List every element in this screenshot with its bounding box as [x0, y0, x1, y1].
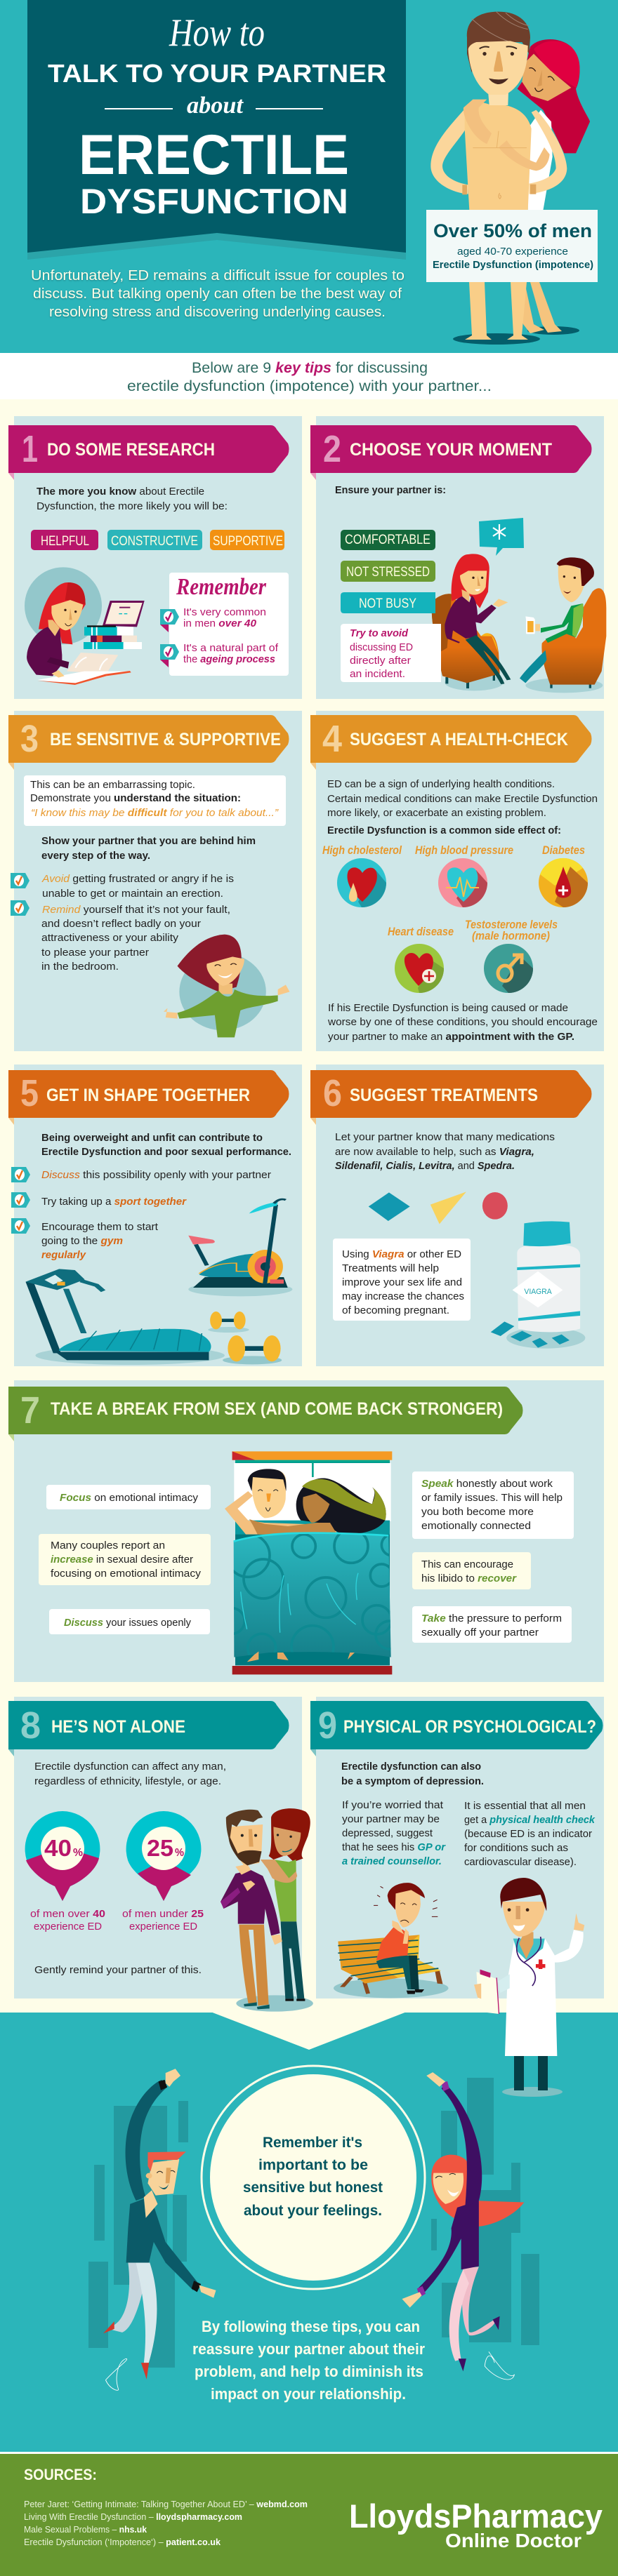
- sources: Male Sexual Problems – nhs.uk: [24, 2524, 147, 2535]
- stat box: over 50% of men: [426, 210, 598, 282]
- condition: testosterone levels: [465, 918, 558, 993]
- text column: health check: get a physical health check: [464, 1814, 596, 1826]
- tip: remind: and doesn’t reflect badly on your: [41, 918, 201, 930]
- text column: health check: [464, 1800, 596, 1868]
- intro text: Sildenafil, Cialis, Levitra, and Spedra.: [335, 1160, 515, 1172]
- condition: high cholesterol: High cholesterol: [322, 843, 402, 857]
- stat box: over 50% of men: aged 40-70 experience: [457, 246, 568, 258]
- chart: 25 percent pin: [122, 1811, 204, 1933]
- panel: 2 choose your moment: [310, 416, 606, 699]
- sources: [24, 2466, 308, 2547]
- closing statement: [192, 2318, 425, 2403]
- illustration: couple in armchairs: [432, 554, 606, 693]
- callout: using viagra: Using Viagra or other ED: [342, 1248, 461, 1260]
- callout: speak: [412, 1471, 574, 1539]
- ribbon heading 2: [310, 425, 591, 473]
- ribbon heading 4: 4: [322, 718, 342, 760]
- panel: 1 do some research: [8, 416, 302, 699]
- closing text: [327, 1002, 598, 1043]
- background bars: right: [431, 2078, 539, 2345]
- callout: understand the situation: “I know this may be difficult for you to talk about...”: [31, 807, 279, 819]
- intro text: Certain medical conditions can make Erectile Dysfunction: [327, 793, 598, 805]
- callout: focus: [46, 1485, 211, 1509]
- sources: SOURCES:: [24, 2466, 97, 2483]
- chart: 40 percent pin: %: [73, 1847, 83, 1859]
- pill: supportive: [210, 530, 284, 550]
- callout: discuss: Discuss your issues openly: [64, 1617, 191, 1629]
- callout: remember: It's very common: [183, 606, 266, 618]
- tip: avoid: Avoid getting frustrated or angry if he is: [41, 873, 234, 885]
- tip: gym: Encourage them to start: [41, 1221, 159, 1233]
- callout: focus: Focus on emotional intimacy: [60, 1492, 198, 1504]
- callout: this can encourage: [412, 1552, 531, 1589]
- tip: gym: going to the gym: [41, 1235, 123, 1247]
- condition: heart disease: Heart disease: [388, 925, 454, 938]
- callout: many couples: [39, 1534, 211, 1585]
- stat box: over 50% of men: Over 50% of men: [433, 220, 592, 241]
- intro text: be a symptom of depression.: [341, 1775, 484, 1787]
- illustration: gym equipment: [25, 1199, 292, 1365]
- intro text: Let your partner know that many medications: [335, 1131, 555, 1143]
- callout: understand the situation: Demonstrate you understand the situation:: [30, 792, 241, 804]
- intro text: The more you know about Erectile: [37, 486, 204, 498]
- icon: check: [11, 873, 29, 888]
- pill: not busy: NOT BUSY: [359, 596, 416, 611]
- background bars: left: [88, 2101, 188, 2368]
- condition: diabetes: Diabetes: [542, 843, 585, 857]
- closing text: If his Erectile Dysfunction is being caused or made: [328, 1002, 568, 1014]
- intro text: [335, 1131, 555, 1172]
- illustration: worried man on bench: [334, 1883, 449, 1998]
- pill: comfortable: [341, 530, 435, 550]
- pill: comfortable: COMFORTABLE: [345, 533, 430, 547]
- closing statement: problem, and help to diminish its: [195, 2363, 423, 2380]
- callout: this can encourage: his libido to recover: [421, 1573, 517, 1584]
- illustration: pill bottle: VIAGRA: [524, 1288, 552, 1296]
- intro text: regardless of ethnicity, lifestyle, or age.: [34, 1775, 221, 1787]
- condition: testosterone levels: (male hormone): [472, 929, 550, 942]
- closing statement: By following these tips, you can: [202, 2318, 420, 2335]
- text column: health check: (because ED is an indicator: [464, 1828, 592, 1840]
- ribbon heading 7: TAKE A BREAK FROM SEX (AND COME BACK STRONGER): [51, 1399, 503, 1419]
- icon: speech bubble: [479, 518, 524, 556]
- chart: 40 percent pin: experience ED: [34, 1921, 102, 1933]
- callout: remember circle: Remember it's: [263, 2135, 362, 2151]
- intro text: more likely, or exacerbate an existing problem.: [327, 807, 546, 819]
- callout: remember: It's a natural part of: [183, 642, 279, 654]
- pill: not stressed: [341, 561, 435, 582]
- intro text: Erectile Dysfunction and poor sexual performance.: [41, 1146, 291, 1158]
- text column: worried: that he sees his GP or: [342, 1841, 446, 1853]
- callout: try to avoid: discussing ED: [350, 641, 413, 653]
- callout: this can encourage: This can encourage: [421, 1559, 513, 1570]
- ribbon heading 6: [310, 1070, 591, 1118]
- tip: remind: in the bedroom.: [41, 961, 119, 973]
- pill: constructive: CONSTRUCTIVE: [111, 534, 198, 549]
- ribbon heading 9: [310, 1701, 603, 1749]
- text column: worried: [342, 1799, 446, 1867]
- title: talk to your partner: TALK TO YOUR PARTNER: [48, 59, 386, 88]
- closing text: worse by one of these conditions, you should encourage: [327, 1016, 598, 1028]
- text column: health check: It is essential that all men: [464, 1800, 586, 1812]
- illustration: woman researching: [25, 567, 145, 685]
- callout: speak: Speak honestly about work: [421, 1478, 553, 1490]
- title banner: [27, 0, 406, 260]
- callout: remember circle: about your feelings.: [244, 2203, 382, 2219]
- chart: 25 percent pin: experience ED: [129, 1921, 197, 1933]
- callout: remember circle: sensitive but honest: [243, 2180, 383, 2196]
- intro heading: 9 key tips: erectile dysfunction (impotence) with your partner...: [127, 378, 492, 394]
- stat box: over 50% of men: Erectile Dysfunction (impotence): [433, 259, 593, 271]
- condition: high blood pressure: High blood pressure: [415, 843, 513, 857]
- chart: 40 percent pin: [25, 1811, 105, 1933]
- intro text: [41, 1132, 291, 1158]
- callout: try to avoid: [341, 624, 441, 682]
- ribbon heading 4: SUGGEST A HEALTH-CHECK: [350, 730, 568, 749]
- panel: 8 he's not alone: [8, 1697, 302, 1998]
- ribbon heading 3: 3: [20, 718, 39, 760]
- condition: testosterone levels: Testosterone levels: [465, 918, 558, 931]
- callout: remember: the ageing process: [183, 653, 275, 665]
- panel: 4 suggest a health-check: [310, 711, 604, 1051]
- tip: avoid: unable to get or maintain an erection.: [42, 888, 223, 900]
- intro text: [37, 486, 228, 512]
- ribbon heading 2: CHOOSE YOUR MOMENT: [350, 440, 552, 460]
- callout: using viagra: of becoming pregnant.: [342, 1304, 449, 1316]
- title: how to: How to: [169, 11, 265, 55]
- ribbon heading 7: 7: [20, 1389, 40, 1432]
- logo: lloydspharmacy online doctor: Online Doctor: [445, 2530, 581, 2551]
- icon: check: [11, 1167, 30, 1182]
- chart: 40 percent pin: of men over 40: [30, 1908, 105, 1920]
- callout: understand the situation: This can be an embarrassing topic.: [30, 779, 195, 791]
- chart: 25 percent pin: %: [175, 1847, 184, 1859]
- intro heading: 9 key tips: Below are 9 key tips for discussing: [192, 360, 428, 376]
- callout: using viagra: improve your sex life and: [342, 1276, 462, 1288]
- callout: speak: or family issues. This will help: [421, 1492, 563, 1504]
- tip: discuss: Discuss this possibility openly with your partner: [41, 1169, 271, 1181]
- tip: gym: regularly: [41, 1249, 86, 1261]
- ribbon heading 7: [8, 1387, 522, 1434]
- intro text: [327, 778, 598, 836]
- ribbon heading 6: SUGGEST TREATMENTS: [350, 1086, 538, 1105]
- callout: remember: [160, 573, 289, 676]
- text column: worried: your partner may be: [342, 1813, 440, 1825]
- logo: lloydspharmacy online doctor: [349, 2497, 603, 2551]
- logo: lloydspharmacy online doctor: LloydsPharmacy: [349, 2497, 603, 2535]
- pill: helpful: [31, 530, 98, 550]
- intro text: Ensure your partner is:: [335, 484, 446, 496]
- callout: discuss: [49, 1609, 210, 1634]
- pill: not busy: [341, 592, 435, 613]
- callout: remember: in men over 40: [183, 618, 257, 629]
- callout: speak: you both become more: [421, 1506, 534, 1518]
- closing text: your partner to make an appointment with the GP.: [328, 1031, 574, 1043]
- callout: remember: Remember: [176, 574, 267, 600]
- ribbon heading 8: [8, 1701, 289, 1749]
- intro text: [34, 1761, 226, 1787]
- callout: take the pressure: Take the pressure to perform: [421, 1613, 562, 1624]
- ribbon heading 8: 8: [20, 1704, 41, 1747]
- supporting statement: every step of the way.: [41, 850, 150, 862]
- panel: 6 suggest treatments: [310, 1065, 604, 1366]
- condition: high cholesterol: [322, 843, 402, 907]
- ribbon heading 1: DO SOME RESEARCH: [47, 440, 215, 460]
- tip: remind: to please your partner: [41, 947, 149, 959]
- illustration: happy woman: [164, 935, 289, 1037]
- intro text: Erectile dysfunction can also: [341, 1761, 481, 1773]
- ribbon heading 5: 5: [20, 1072, 39, 1114]
- icon: check third: [11, 1218, 30, 1234]
- illustration: embracing couple: [430, 12, 590, 345]
- icon: check second: [11, 900, 29, 916]
- callout: try to avoid: directly after: [350, 655, 411, 667]
- pill: not stressed: NOT STRESSED: [346, 565, 430, 580]
- supporting statement: Show your partner that you are behind him: [41, 835, 256, 847]
- ribbon heading 3: BE SENSITIVE & SUPPORTIVE: [50, 730, 281, 749]
- ribbon heading 9: 9: [318, 1704, 337, 1747]
- condition: diabetes: [539, 843, 588, 907]
- icon: tablets: [369, 1192, 508, 1224]
- pill: supportive: SUPPORTIVE: [213, 534, 283, 549]
- ribbon heading 5: [8, 1070, 289, 1118]
- title: about: about: [187, 93, 244, 119]
- chart: 25 percent pin: of men under 25: [122, 1908, 204, 1920]
- callout: using viagra: may increase the chances: [342, 1290, 464, 1302]
- panel: 5 get in shape together: [8, 1065, 302, 1366]
- panel: 7 take a break from sex: [8, 1380, 604, 1682]
- intro paragraph: resolving stress and discovering underlying causes.: [49, 305, 386, 320]
- tip: remind: Remind yourself that it’s not your fault,: [42, 904, 230, 916]
- sources: Living With Erectile Dysfunction – lloydspharmacy.com: [24, 2511, 242, 2522]
- ribbon heading 1: [8, 425, 289, 473]
- intro text: Erectile Dysfunction is a common side effect of:: [327, 825, 561, 836]
- text column: health check: cardiovascular disease).: [464, 1856, 577, 1868]
- closing statement: reassure your partner about their: [192, 2340, 425, 2358]
- supporting statement: [41, 835, 256, 862]
- text column: worried: depressed, suggest: [342, 1827, 433, 1839]
- callout: take the pressure: [412, 1606, 572, 1643]
- title: dysfunction: DYSFUNCTION: [80, 182, 348, 221]
- ribbon heading 6: 6: [323, 1072, 342, 1114]
- closing text: Gently remind your partner of this.: [34, 1964, 202, 1976]
- callout: take the pressure: sexually off your partner: [421, 1627, 539, 1639]
- condition: high blood pressure: [415, 843, 513, 907]
- icon: check second: [160, 644, 179, 667]
- ribbon heading 8: HE’S NOT ALONE: [51, 1717, 185, 1737]
- icon: check: [160, 609, 179, 632]
- tip: remind: attractiveness or your ability: [41, 932, 179, 944]
- text column: health check: for conditions such as: [464, 1842, 568, 1854]
- tip: sport together: Try taking up a sport together: [41, 1196, 187, 1208]
- intro text: Being overweight and unfit can contribute to: [41, 1132, 263, 1144]
- callout: try to avoid: Try to avoid: [350, 627, 409, 639]
- tip: gym: [41, 1221, 159, 1261]
- callout: try to avoid: an incident.: [350, 668, 405, 680]
- pill: helpful: HELPFUL: [41, 534, 89, 549]
- intro paragraph: Unfortunately, ED remains a difficult issue for couples to: [31, 268, 405, 283]
- callout: many couples: Many couples report an: [51, 1540, 165, 1551]
- chart: 40 percent pin: 40: [44, 1835, 72, 1861]
- sources: Peter Jaret: ‘Getting Intimate: Talking Together About ED’ – webmd.com: [24, 2499, 308, 2509]
- callout: many couples: focusing on emotional intimacy: [51, 1568, 202, 1580]
- illustration: pill bottle: [491, 1221, 585, 1349]
- condition: heart disease: [388, 925, 454, 993]
- illustration: couple in bed: [219, 1451, 404, 1674]
- intro paragraph: discuss. But talking openly can often be the best way of: [33, 286, 402, 302]
- illustration: doctor: [474, 1878, 584, 2097]
- illustration: jumping man: [103, 2069, 216, 2390]
- text column: worried: a trained counsellor.: [342, 1855, 442, 1867]
- callout: remember circle: important to be: [258, 2157, 368, 2173]
- callout: speak: emotionally connected: [421, 1520, 531, 1532]
- title: erectile: ERECTILE: [79, 124, 349, 187]
- chart: 25 percent pin: 25: [147, 1835, 173, 1861]
- callout: using viagra: [333, 1239, 471, 1321]
- intro heading: 9 key tips: [127, 360, 492, 394]
- callout: using viagra: Treatments will help: [342, 1262, 439, 1274]
- callout: many couples: increase in sexual desire after: [51, 1554, 193, 1566]
- ribbon heading 2: 2: [323, 428, 341, 470]
- callout: remember circle: [202, 2066, 425, 2289]
- intro text: Dysfunction, the more likely you will be:: [37, 500, 228, 512]
- ribbon heading 5: GET IN SHAPE TOGETHER: [46, 1086, 250, 1105]
- ribbon heading 1: 1: [22, 428, 38, 470]
- intro text: Erectile dysfunction can affect any man,: [34, 1761, 226, 1773]
- icon: check second: [11, 1192, 30, 1208]
- intro text: ED can be a sign of underlying health conditions.: [327, 778, 555, 790]
- ribbon heading 4: [310, 715, 591, 763]
- tip: remind: [41, 904, 230, 973]
- tip: avoid: [41, 873, 234, 900]
- text column: worried: If you’re worried that: [342, 1799, 444, 1811]
- sources: Erectile Dysfunction (‘Impotence‘) – patient.co.uk: [24, 2537, 221, 2547]
- closing statement: impact on your relationship.: [211, 2385, 406, 2403]
- panel: 9 physical or psychological: [310, 1697, 604, 1998]
- ribbon heading 3: [8, 715, 289, 763]
- panel: 3 be sensitive and supportive: [8, 711, 302, 1051]
- intro text: are now available to help, such as Viagra,: [335, 1146, 534, 1158]
- intro text: [341, 1761, 484, 1787]
- illustration: supportive couple: [221, 1808, 313, 2012]
- pill: constructive: [107, 530, 202, 550]
- illustration: jumping woman: [402, 2072, 524, 2380]
- callout: understand the situation: [24, 775, 286, 826]
- intro paragraph: [31, 268, 405, 320]
